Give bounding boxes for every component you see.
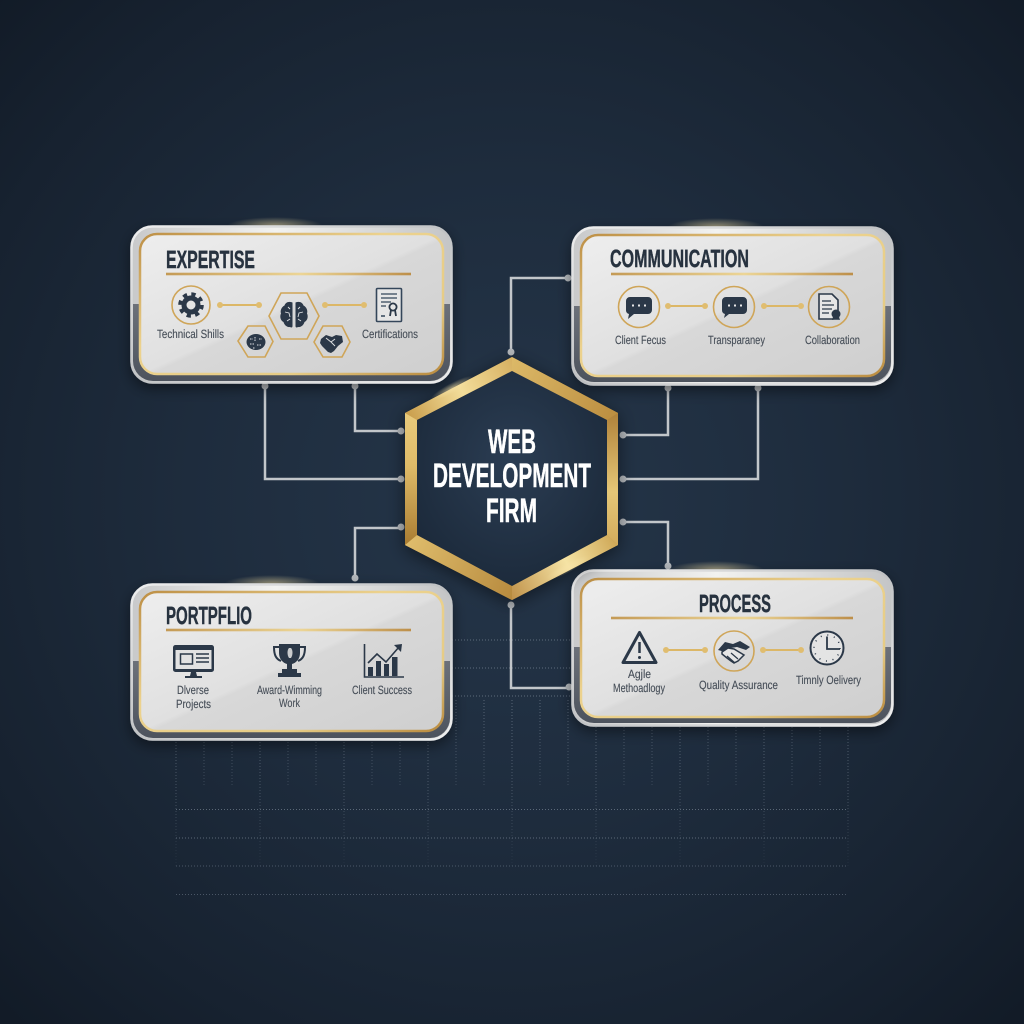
- hub title: WEB: [488, 423, 536, 461]
- connectors: [262, 274, 762, 690]
- label: transparency: Transparaney: [708, 333, 765, 347]
- label: award-winning work: Work: [279, 696, 301, 710]
- label: diverse projects: Projects: [176, 697, 211, 711]
- link: [663, 647, 708, 653]
- icon: network hexagon: [238, 326, 273, 357]
- heading: PROCESS: [699, 590, 771, 618]
- heading: COMMUNICATION: [610, 245, 749, 273]
- label: technical skills: Technical Shills: [157, 327, 224, 341]
- link: [217, 302, 262, 308]
- icon: chat bubble: [618, 286, 660, 328]
- central hexagon: [405, 357, 618, 600]
- label: quality assurance: Quality Assurance: [699, 678, 778, 692]
- label: timely delivery: Timnly Oelivery: [796, 673, 861, 687]
- label: client focus: Client Fecus: [615, 333, 666, 347]
- link: [761, 303, 804, 309]
- heading: PORTPFLIO: [166, 602, 252, 630]
- dotted grid: [176, 640, 848, 894]
- icon: document: [808, 286, 850, 328]
- connector: expertise to hub: [262, 382, 404, 482]
- link: [665, 303, 708, 309]
- icon: chat bubble: [714, 286, 754, 328]
- link: [322, 302, 367, 308]
- label: agile methodology: Methoadlogy: [613, 681, 665, 695]
- heading rule: [166, 629, 411, 631]
- hub title: FIRM: [486, 492, 537, 530]
- icon: trophy: [274, 644, 305, 677]
- label: agile methodology: Agjle: [628, 667, 651, 681]
- icon: gear: [172, 286, 210, 324]
- icon: brain hexagon: [269, 293, 319, 339]
- heading rule: [611, 617, 853, 619]
- panel: expertise: [132, 217, 452, 382]
- hub title: DEVELOPMENT: [433, 457, 591, 495]
- heading: EXPERTISE: [166, 246, 255, 274]
- hub title: [433, 423, 591, 530]
- heading rule: [611, 273, 853, 275]
- icon: certificate: [376, 288, 402, 322]
- icon: monitor: [173, 645, 214, 678]
- icon: clock: [810, 632, 844, 664]
- label: collaboration: Collaboration: [805, 333, 860, 347]
- icon: growth chart: [364, 644, 404, 677]
- connector: communication to hub: [508, 274, 762, 482]
- panel: portfolio: [132, 575, 452, 740]
- link: [760, 647, 804, 653]
- label: award-winning work: Award-Wimming: [257, 683, 322, 697]
- label: client success: Client Success: [352, 683, 412, 697]
- panel: communication: [572, 218, 892, 384]
- label: diverse projects: [176, 683, 211, 711]
- label: diverse projects: Dlverse: [177, 683, 209, 697]
- icon: handshake hexagon: [314, 326, 350, 357]
- label: certifications: Certifications: [362, 327, 418, 341]
- label: agile methodology: [613, 667, 665, 695]
- heading rule: [166, 273, 411, 275]
- connector: process to hub: [508, 518, 672, 690]
- icon: handshake: [714, 631, 754, 671]
- label: award-winning work: [257, 683, 322, 710]
- icon: warning triangle: [623, 632, 656, 662]
- panel: process: [572, 561, 892, 726]
- connector: portfolio to hub: [352, 524, 404, 582]
